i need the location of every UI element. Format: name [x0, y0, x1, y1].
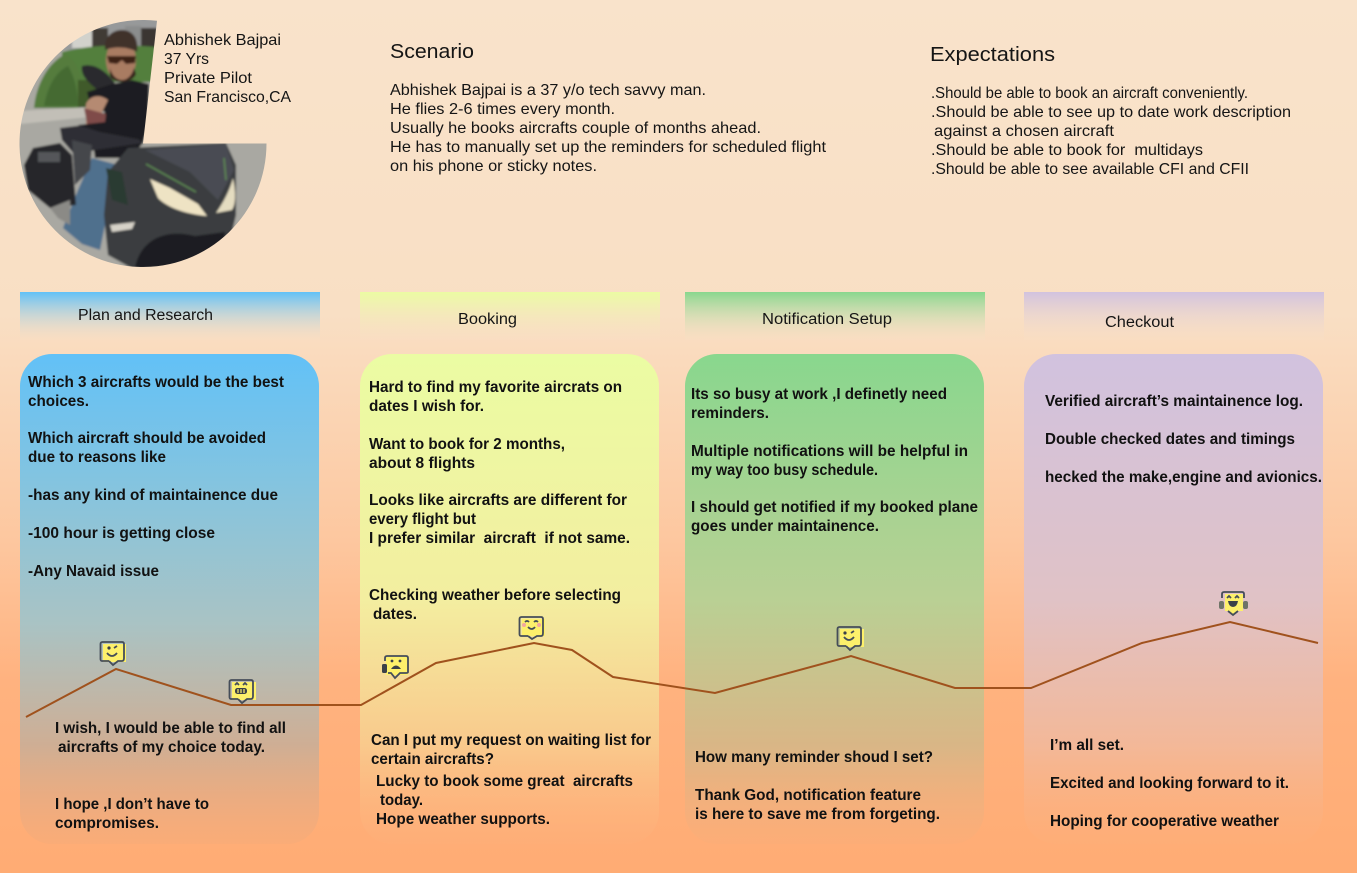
persona details: 37 Yrs — [164, 51, 209, 68]
thoughts: notification setup: reminders. — [691, 405, 769, 422]
persona details: Private Pilot — [164, 70, 253, 87]
feelings: booking: certain aircrafts? — [371, 751, 494, 768]
scenario text: Usually he books aircrafts couple of months ahead. — [390, 120, 761, 137]
header: Plan and Research — [20, 292, 320, 340]
header: Checkout — [1024, 292, 1324, 340]
thoughts: booking: Checking weather before selecting — [369, 587, 621, 604]
icon: winking smile — [100, 642, 126, 665]
feelings: plan and research: I wish, I would be able to find all — [55, 720, 286, 737]
luggage case — [24, 143, 76, 208]
feelings: checkout — [1050, 737, 1289, 830]
icon: excited with raised hands — [1219, 592, 1248, 615]
expectations text: .Should be able to see up to date work description — [931, 104, 1291, 121]
feelings: plan and research: aircrafts of my choice today. — [58, 739, 265, 756]
thoughts: checkout: Verified aircraft’s maintainence log. — [1045, 393, 1303, 410]
icon: happy wink — [838, 627, 864, 650]
panel: notification setup — [685, 354, 984, 844]
thoughts: plan and research: -100 hour is getting close — [28, 525, 215, 542]
thoughts: notification setup: Multiple notifications will be helpful in — [691, 443, 968, 460]
thoughts: booking: every flight but — [369, 511, 476, 528]
thoughts: plan and research — [28, 374, 284, 580]
panel: booking — [360, 354, 659, 844]
thoughts: plan and research: Which 3 aircrafts would be the best — [28, 374, 284, 391]
persona details — [164, 32, 291, 106]
scenario text: He flies 2-6 times every month. — [390, 101, 615, 118]
feelings: booking: today. — [380, 792, 423, 809]
feelings: checkout: Hoping for cooperative weather — [1050, 813, 1279, 830]
feelings: booking: Lucky to book some great aircrafts — [376, 773, 633, 790]
thoughts: notification setup: Its so busy at work ,I definetly need — [691, 386, 947, 403]
scenario heading: Scenario — [390, 41, 474, 63]
panel: checkout — [1024, 354, 1323, 844]
expectations text — [931, 85, 1291, 178]
feelings: plan and research — [55, 720, 286, 832]
header: Booking: Booking — [458, 311, 517, 328]
thoughts: booking: dates I wish for. — [369, 398, 484, 415]
scenario text — [390, 82, 827, 175]
header: Notification Setup — [685, 292, 985, 340]
feelings: booking: Can I put my request on waiting list for — [371, 732, 651, 749]
thoughts: plan and research: -Any Navaid issue — [28, 563, 159, 580]
thoughts: plan and research: due to reasons like — [28, 449, 166, 466]
feelings: plan and research: compromises. — [55, 815, 159, 832]
header: Notification Setup: Notification Setup — [762, 311, 892, 328]
panel: plan and research — [20, 354, 319, 844]
expectations heading: Expectations — [930, 44, 1055, 66]
thoughts: plan and research: Which aircraft should be avoided — [28, 430, 266, 447]
bike — [104, 143, 236, 270]
thoughts: notification setup — [691, 386, 978, 535]
expectations text: .Should be able to book for multidays — [931, 142, 1203, 159]
feelings: notification setup — [695, 749, 940, 823]
expectations text: against a chosen aircraft — [934, 123, 1115, 140]
feelings: booking: Hope weather supports. — [376, 811, 550, 828]
thoughts: booking: dates. — [373, 606, 417, 623]
thoughts: plan and research: -has any kind of maintainence due — [28, 487, 278, 504]
header: Checkout: Checkout — [1105, 314, 1175, 331]
feelings: checkout: I’m all set. — [1050, 737, 1124, 754]
persona details: Abhishek Bajpai — [164, 32, 281, 49]
thoughts: booking: I prefer similar aircraft if not same. — [369, 530, 630, 547]
thoughts: booking: Hard to find my favorite aircrats on — [369, 379, 622, 396]
scenario text: on his phone or sticky notes. — [390, 158, 597, 175]
icon: blushing smile — [520, 617, 545, 639]
feelings: plan and research: I hope ,I don’t have to — [55, 796, 209, 813]
profile photo — [15, 15, 270, 270]
thoughts: checkout — [1045, 393, 1322, 486]
header: Booking — [360, 292, 660, 340]
thoughts: notification setup: goes under maintainence. — [691, 518, 879, 535]
header: Plan and Research: Plan and Research — [78, 307, 213, 324]
expectations text: .Should be able to book an aircraft conveniently. — [931, 85, 1248, 102]
feelings: notification setup: is here to save me from forgeting. — [695, 806, 940, 823]
expectations text: .Should be able to see available CFI and CFII — [931, 161, 1249, 178]
icon: grimace — [230, 680, 256, 703]
thoughts: booking: Looks like aircrafts are different for — [369, 492, 627, 509]
thoughts: checkout: Double checked dates and timings — [1045, 431, 1295, 448]
thoughts: notification setup: I should get notified if my booked plane — [691, 499, 978, 516]
thoughts: checkout: hecked the make,engine and avionics. — [1045, 469, 1322, 486]
scenario text: He has to manually set up the reminders for scheduled flight — [390, 139, 827, 156]
feelings: notification setup: Thank God, notification feature — [695, 787, 921, 804]
feelings: booking — [371, 732, 651, 828]
thoughts: booking: Want to book for 2 months, — [369, 436, 565, 453]
thoughts: booking — [369, 379, 630, 623]
thoughts: notification setup: my way too busy schedule. — [691, 462, 878, 479]
feelings: notification setup: How many reminder shoud I set? — [695, 749, 933, 766]
persona details: San Francisco,CA — [164, 89, 291, 106]
icon: worried face with phone — [382, 656, 408, 678]
scenario text: Abhishek Bajpai is a 37 y/o tech savvy man. — [390, 82, 706, 99]
thoughts: booking: about 8 flights — [369, 455, 475, 472]
feelings: checkout: Excited and looking forward to it. — [1050, 775, 1289, 792]
thoughts: plan and research: choices. — [28, 393, 89, 410]
jeans — [63, 158, 118, 250]
emotion journey line — [26, 622, 1318, 717]
rider — [82, 65, 118, 92]
